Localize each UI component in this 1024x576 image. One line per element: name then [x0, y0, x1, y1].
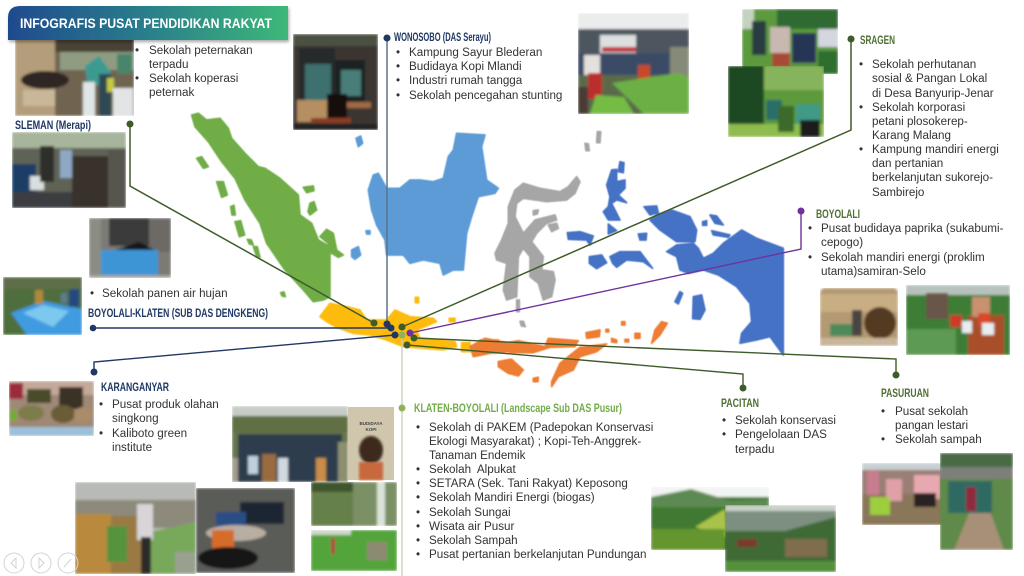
heading: Karanganyar: KARANGANYAR — [101, 382, 170, 394]
island: Kalimantan — [352, 133, 498, 275]
text: Karanganyar list: • — [99, 427, 103, 440]
photo: students in field — [232, 406, 348, 482]
text: Pasuruan list: Sekolah sampah — [895, 433, 982, 446]
photo: hydroponics visit — [75, 482, 196, 574]
photo: tube rafting — [196, 488, 295, 573]
text: Wonosobo list — [396, 46, 562, 102]
text: Pacitan list: Pengelolaan DAS — [735, 428, 827, 441]
text: Karanganyar list: singkong — [112, 412, 159, 425]
text: Pacitan list: • — [722, 414, 726, 427]
connector: Boyolali — [407, 208, 804, 336]
text: Sragen list — [859, 58, 999, 199]
text: Boyolali list: • — [808, 251, 812, 264]
photo: Pacitan hills — [651, 487, 769, 550]
text: Klaten-Boyolali list: • — [416, 477, 420, 490]
text: Sragen list: • — [859, 101, 863, 114]
text: Boyolali list — [808, 222, 1004, 278]
photo: greenhouse — [578, 13, 689, 114]
text: Pasuruan list: • — [881, 405, 885, 418]
connector: Sleman — [127, 121, 377, 326]
photo: rainwater pool — [3, 277, 82, 335]
connector: Pacitan — [404, 342, 746, 391]
connector: Pasuruan — [411, 335, 899, 378]
text: Pacitan list — [722, 414, 836, 456]
text: Sragen list: • — [859, 143, 863, 156]
text: Karanganyar list: Kaliboto green — [112, 427, 187, 440]
text: Wonosobo list: • — [396, 60, 400, 73]
photo: Pacitan forest — [725, 505, 836, 572]
text: Klaten-Boyolali list: • — [416, 421, 420, 434]
connector: Klaten-Boyolali — [399, 332, 405, 576]
text: Sragen list: Karang Malang — [872, 129, 951, 142]
heading: Klaten-Boyolali: KLATEN-BOYOLALI (Landscape Sub DAS Pusur) — [414, 403, 622, 415]
connector: Boyolali-Klaten — [90, 325, 394, 331]
text: Pasuruan list: pangan lestari — [895, 419, 968, 432]
text: Klaten-Boyolali list: Sekolah Mandiri Energi (biogas) — [429, 491, 595, 504]
text: peternakan list — [135, 44, 253, 99]
text: Sragen list: Sekolah korporasi — [872, 101, 965, 114]
text: Wonosobo list: Industri rumah tangga — [409, 74, 523, 87]
text: Karanganyar list: Pusat produk olahan — [112, 398, 219, 411]
text: Sragen list: Kampung mandiri energi — [872, 143, 999, 156]
text: Boyolali list: • — [808, 222, 812, 235]
text: panen air hujan: • — [90, 287, 94, 300]
text: Klaten-Boyolali list: Ekologi Masyarakat) ; Kopi-Teh-Anggrek- — [429, 435, 641, 448]
photo: Budidaya Kopi book — [348, 407, 394, 480]
text: Klaten-Boyolali list: Sekolah Sampah — [429, 534, 518, 547]
island: Maluku and Papua — [567, 162, 783, 355]
heading: Boyolali: BOYOLALI — [816, 209, 860, 221]
text: Pasuruan list: Pusat sekolah — [895, 405, 968, 418]
text: Sragen list: sosial & Pangan Lokal — [872, 72, 987, 85]
photo: Pasuruan garden — [862, 463, 942, 525]
text: Klaten-Boyolali list: Wisata air Pusur — [429, 520, 515, 533]
connector: Wonosobo — [384, 35, 390, 327]
text: Klaten-Boyolali list: • — [416, 548, 420, 561]
text: Pacitan list: Sekolah konservasi — [735, 414, 836, 427]
text: Wonosobo list: • — [396, 46, 400, 59]
text: Klaten-Boyolali list: Sekolah di PAKEM (Padepokan Konservasi — [429, 421, 653, 434]
photo: water tank — [89, 218, 171, 278]
text: Sragen list: Sambirejo — [872, 186, 924, 199]
photo: Pasuruan path — [940, 453, 1013, 550]
text: Sragen list: di Desa Banyurip-Jenar — [872, 87, 994, 100]
text: Karanganyar list: • — [99, 398, 103, 411]
photo: Wonosobo coffee products — [293, 34, 378, 130]
text: Klaten-Boyolali list: • — [416, 520, 420, 533]
text: peternakan list: terpadu — [149, 58, 188, 71]
text: Sragen list: dan pertanian — [872, 157, 943, 170]
island: Sumatra — [192, 113, 343, 302]
title banner — [8, 6, 288, 40]
text: Wonosobo list: Sekolah pencegahan stunting — [409, 89, 562, 102]
photo: Karanganyar cassava products — [9, 381, 94, 436]
island: Java and Bali — [320, 297, 470, 352]
text: Klaten-Boyolali list — [416, 421, 653, 561]
photo: Sleman visit — [12, 132, 126, 208]
photo: Budidaya Kopi book: BUDIDAYA — [360, 421, 383, 426]
text: Boyolali list: cepogo) — [821, 236, 863, 249]
text: Sragen list: berkelanjutan sukorejo- — [872, 171, 993, 184]
photo: rice field top — [311, 482, 397, 526]
text: Wonosobo list: • — [396, 89, 400, 102]
island: Nusa Tenggara — [470, 322, 667, 387]
photo: Boyolali excavation — [820, 288, 898, 346]
connector: Sragen — [399, 36, 854, 330]
text: peternakan list: peternak — [149, 86, 194, 99]
text: Sragen list: • — [859, 58, 863, 71]
text: Karanganyar list — [99, 398, 219, 454]
heading: Sragen: SRAGEN — [860, 35, 895, 47]
text: Klaten-Boyolali list: • — [416, 506, 420, 519]
map of Indonesia — [192, 113, 783, 387]
photo: Boyolali paprika — [906, 285, 1010, 355]
text: peternakan list: • — [135, 72, 139, 85]
island: Sulawesi — [495, 132, 601, 327]
text: peternakan list: Sekolah koperasi — [149, 72, 238, 85]
text: Boyolali list: utama)samiran-Selo — [821, 265, 926, 278]
text: panen air hujan: Sekolah panen air hujan — [102, 287, 228, 300]
photo: Sragen field top — [742, 9, 838, 74]
text: Pacitan list: • — [722, 428, 726, 441]
text: Klaten-Boyolali list: SETARA (Sek. Tani Rakyat) Keposong — [429, 477, 628, 490]
photo: cow shed — [15, 40, 134, 116]
heading: Pasuruan: PASURUAN — [881, 388, 929, 400]
heading: Sleman: SLEMAN (Merapi) — [15, 120, 91, 132]
photo: Sragen field bottom — [728, 66, 824, 137]
text: Klaten-Boyolali list: Pusat pertanian berkelanjutan Pundungan — [429, 548, 646, 561]
text: Sragen list: petani plosokerep- — [872, 115, 968, 128]
photo: rice field bottom — [311, 530, 397, 571]
text: Wonosobo list: Budidaya Kopi Mlandi — [409, 60, 522, 73]
text: Pasuruan list: • — [881, 433, 885, 446]
text: Klaten-Boyolali list: • — [416, 534, 420, 547]
text: Boyolali list: Sekolah mandiri energi (proklim — [821, 251, 985, 264]
heading: Pacitan: PACITAN — [721, 398, 759, 410]
text: Pasuruan list — [881, 405, 982, 446]
text: Pacitan list: terpadu — [735, 443, 774, 456]
text: Karanganyar list: institute — [112, 441, 152, 454]
slide navigation buttons — [4, 553, 78, 573]
connector: Karanganyar — [91, 332, 398, 375]
text: peternakan list: • — [135, 44, 139, 57]
text: Wonosobo list: • — [396, 74, 400, 87]
text: Boyolali list: Pusat budidaya paprika (sukabumi- — [821, 222, 1004, 235]
text: Sragen list: Sekolah perhutanan — [872, 58, 976, 71]
text: Klaten-Boyolali list: Sekolah Alpukat — [429, 463, 516, 476]
title banner: INFOGRAFIS PUSAT PENDIDIKAN RAKYAT — [20, 15, 272, 31]
text: Wonosobo list: Kampung Sayur Blederan — [409, 46, 542, 59]
text: Klaten-Boyolali list: • — [416, 491, 420, 504]
text: peternakan list: Sekolah peternakan — [149, 44, 253, 57]
heading: Wonosobo: WONOSOBO (DAS Serayu) — [394, 32, 491, 44]
photo: Budidaya Kopi book: KOPI — [365, 427, 377, 432]
heading: Boyolali-Klaten: BOYOLALI-KLATEN (SUB DAS DENGKENG) — [88, 308, 268, 320]
text: Klaten-Boyolali list: • — [416, 463, 420, 476]
text: Klaten-Boyolali list: Sekolah Sungai — [429, 506, 511, 519]
text: Klaten-Boyolali list: Tanaman Endemik — [429, 449, 526, 462]
